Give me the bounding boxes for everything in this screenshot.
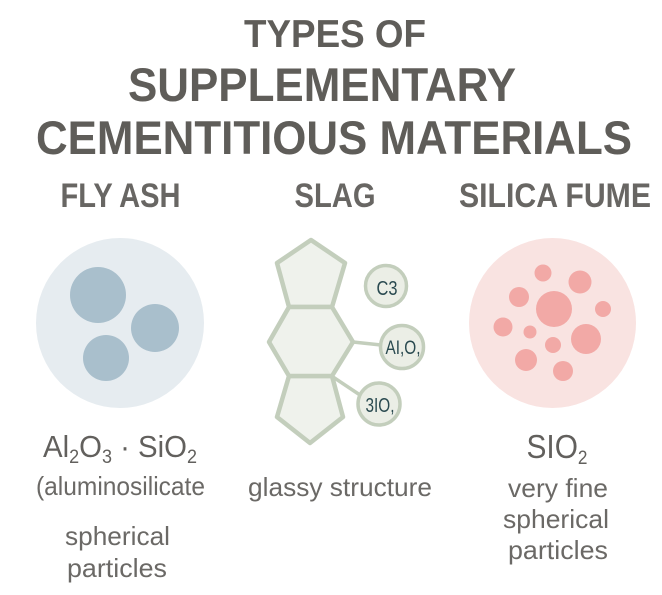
text: very fine spherical particles: spherical xyxy=(503,504,609,534)
node: Al2O3: AI,O, xyxy=(386,338,420,359)
node: SiO2 xyxy=(358,383,400,425)
formula: fly ash: 2 xyxy=(69,447,79,468)
text: very fine spherical particles xyxy=(503,473,609,565)
formula: fly ash: 3 xyxy=(102,447,112,468)
text: very fine spherical particles: very fine xyxy=(508,473,608,503)
formula: silica fume: 2 xyxy=(578,448,588,469)
text: spherical particles: spherical xyxy=(65,521,170,551)
node: C3 xyxy=(366,266,406,306)
node: C3: C3 xyxy=(376,278,398,300)
polygon network xyxy=(269,240,353,443)
connector lines xyxy=(333,342,381,395)
formula: silica fume: SIO xyxy=(526,428,583,465)
title: CEMENTITIOUS MATERIALS xyxy=(36,111,632,164)
formula: fly ash: Al xyxy=(43,429,71,464)
column heading: slag: SLAG xyxy=(294,177,376,215)
formula: fly ash: 2 xyxy=(187,447,197,468)
text: glassy structure: glassy structure xyxy=(248,472,432,502)
icon: silica fume particles xyxy=(469,238,636,408)
icon: fly ash particles xyxy=(36,238,204,408)
title: SUPPLEMENTARY xyxy=(128,58,516,111)
column heading: fly ash: FLY ASH xyxy=(60,177,180,215)
title: TYPES OF xyxy=(244,13,426,56)
icon: slag glassy structure xyxy=(269,240,424,443)
formula: fly ash: O xyxy=(79,429,102,464)
text: spherical particles: particles xyxy=(67,553,167,583)
node: SiO2: 3IO, xyxy=(366,395,394,417)
node: Al2O3 xyxy=(380,326,424,368)
text: very fine spherical particles: particles xyxy=(508,535,608,565)
formula: fly ash: · SiO xyxy=(112,429,187,464)
title xyxy=(36,13,632,164)
text: spherical particles xyxy=(65,521,170,583)
text: aluminosilicate: (aluminosilicate xyxy=(36,471,205,501)
